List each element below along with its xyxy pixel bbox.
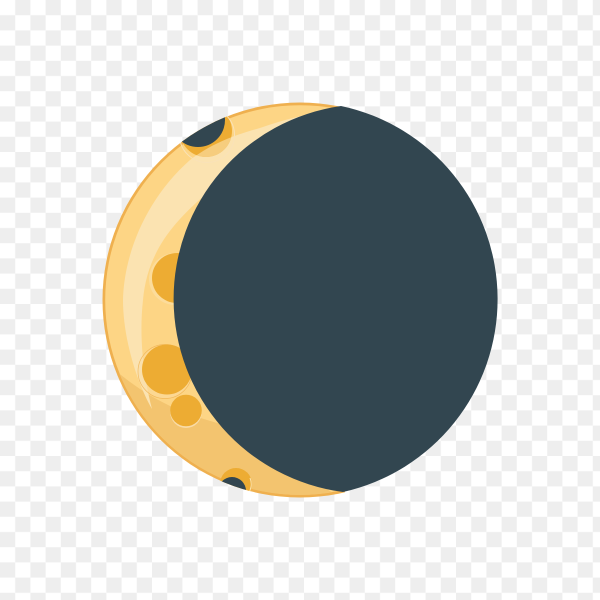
crater: left middle [149, 253, 202, 305]
dark shadow covering the moon [174, 106, 498, 492]
lower shaded area [120, 374, 332, 495]
highlight band [123, 108, 345, 409]
crater: top with shadow [180, 116, 235, 158]
moon disc [102, 102, 345, 498]
crater: bottom with shadow [220, 468, 252, 492]
crater: small lower [170, 395, 202, 428]
crater: large lower [138, 344, 192, 398]
